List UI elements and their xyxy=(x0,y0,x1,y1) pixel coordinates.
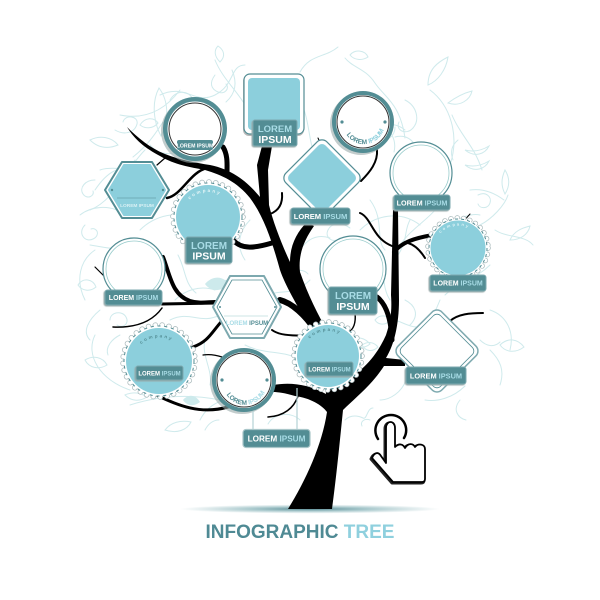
panel: white circle left xyxy=(103,238,165,305)
decorative floral swirls xyxy=(78,46,533,432)
label xyxy=(253,120,297,146)
panel: teal ring circle top right xyxy=(330,91,394,155)
panel: rounded square top xyxy=(243,74,304,146)
panel: teal ring circle bottom xyxy=(210,348,276,414)
tree xyxy=(95,127,483,509)
panel: teal ring circle top right: LOREM IPSUM xyxy=(346,128,384,144)
panel: scalloped badge bottom left: company xyxy=(140,335,172,344)
label xyxy=(329,287,377,314)
label: LOREM IPSUM xyxy=(177,144,213,150)
label: LOREM xyxy=(335,291,371,302)
ground shadow xyxy=(180,504,440,514)
panel: hexagon blue left xyxy=(105,162,169,218)
label: IPSUM xyxy=(192,250,226,262)
hanging label xyxy=(243,388,310,448)
label: LOREM xyxy=(191,241,227,252)
panel: white hexagon middle: LOREM IPSUM xyxy=(226,321,268,327)
title: INFOGRAPHIC TREE xyxy=(206,522,394,543)
label: LOREM IPSUM xyxy=(109,295,158,302)
label xyxy=(186,237,232,263)
panel: scalloped badge centre: company xyxy=(308,328,340,338)
label: LOREM IPSUM xyxy=(308,368,351,374)
label: LOREM IPSUM xyxy=(433,280,483,288)
panel: scalloped badge right xyxy=(425,215,491,293)
trunk and main limbs xyxy=(127,127,405,509)
panel: teal ring circle top left xyxy=(161,97,227,163)
label: IPSUM xyxy=(336,301,370,313)
curved label xyxy=(345,132,383,144)
label: LOREM IPSUM xyxy=(410,372,462,380)
label: LOREM IPSUM xyxy=(294,212,347,221)
panel: scalloped badge right: company xyxy=(439,223,468,233)
icon: pointing hand xyxy=(371,415,425,483)
panel: teal ring circle bottom: LOREM IPSUM xyxy=(226,390,265,405)
panel: scalloped badge centre xyxy=(291,319,365,393)
panel: diamond blue xyxy=(281,137,363,224)
panel: scalloped badge left xyxy=(170,179,246,265)
hanging label: LOREM IPSUM xyxy=(248,434,306,444)
panel: white hexagon middle xyxy=(213,276,281,338)
panel: white circle right xyxy=(390,142,452,210)
label: IPSUM xyxy=(258,134,292,146)
curved label xyxy=(225,392,265,405)
panel: scalloped badge left: company xyxy=(188,190,220,200)
panel: scalloped badge bottom left xyxy=(120,322,198,400)
label: LOREM xyxy=(258,124,292,135)
label: LOREM IPSUM xyxy=(397,198,447,208)
panel: hexagon blue left: LOREM IPSUM xyxy=(120,203,154,209)
panel: white circle centre xyxy=(320,236,386,314)
panel: white diamond right xyxy=(393,307,481,395)
label: LOREM IPSUM xyxy=(138,372,181,378)
branches xyxy=(95,138,483,417)
decorative blue leaves xyxy=(183,278,477,405)
